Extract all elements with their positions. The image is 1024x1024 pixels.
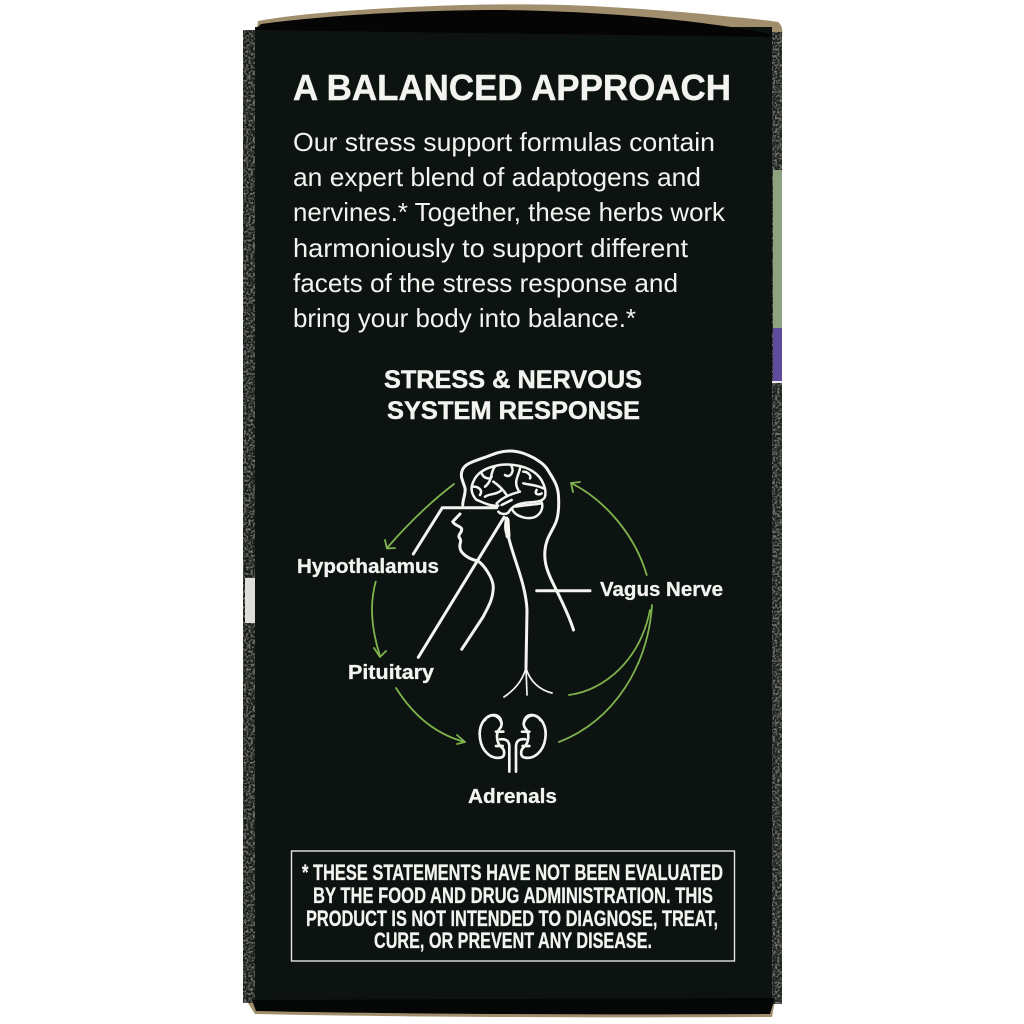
disclaimer text: [302, 860, 723, 953]
vagus nerve pointer: [537, 589, 590, 592]
right purple section: [773, 328, 782, 381]
body paragraph: Our stress support formulas contain: [293, 127, 715, 157]
label: hypothalamus: Hypothalamus: [297, 556, 439, 578]
diagram heading: SYSTEM RESPONSE: [387, 397, 640, 425]
diagram heading: STRESS & NERVOUS: [384, 366, 642, 394]
right white line: [772, 381, 782, 383]
pituitary pointer: [418, 517, 504, 657]
left side strip: [243, 30, 256, 1003]
brain: [472, 464, 545, 518]
body paragraph: [293, 127, 726, 333]
icon: kidneys: [480, 715, 546, 772]
body paragraph: facets of the stress response and: [293, 268, 678, 298]
disclaimer text: CURE, OR PREVENT ANY DISEASE.: [374, 928, 652, 953]
box edges: [243, 4, 782, 1017]
head silhouette: [453, 451, 574, 649]
right green section: [773, 170, 782, 328]
disclaimer text: * THESE STATEMENTS HAVE NOT BEEN EVALUATED: [302, 860, 723, 885]
label: vagus nerve: Vagus Nerve: [600, 579, 723, 601]
top shadow: [255, 10, 772, 37]
green cycle arrows: [372, 482, 652, 744]
bottom shadow: [252, 998, 775, 1014]
main dark panel: [255, 27, 772, 1003]
hypothalamus pointer: [413, 508, 497, 554]
top cardboard flap: [255, 4, 782, 40]
body paragraph: bring your body into balance.*: [293, 303, 636, 333]
bottom cardboard edge: [246, 1000, 775, 1017]
label: pituitary: Pituitary: [348, 662, 435, 684]
diagram heading: [384, 366, 642, 425]
disclaimer text: PRODUCT IS NOT INTENDED TO DIAGNOSE, TREAT,: [306, 906, 718, 931]
body paragraph: harmoniously to support different: [293, 233, 689, 263]
disclaimer border: [292, 851, 734, 961]
disclaimer text: BY THE FOOD AND DRUG ADMINISTRATION. THIS: [313, 883, 713, 908]
label: adrenals: Adrenals: [468, 786, 557, 808]
disclaimer box: [292, 851, 734, 961]
body paragraph: an expert blend of adaptogens and: [293, 162, 701, 192]
title: A BALANCED APPROACH: [293, 67, 731, 108]
spinal cord and nerve roots: [504, 518, 552, 697]
body paragraph: nervines.* Together, these herbs work: [293, 197, 726, 227]
left white gap: [245, 578, 255, 623]
right side strip: [769, 32, 782, 1004]
stress response diagram: [297, 451, 723, 808]
